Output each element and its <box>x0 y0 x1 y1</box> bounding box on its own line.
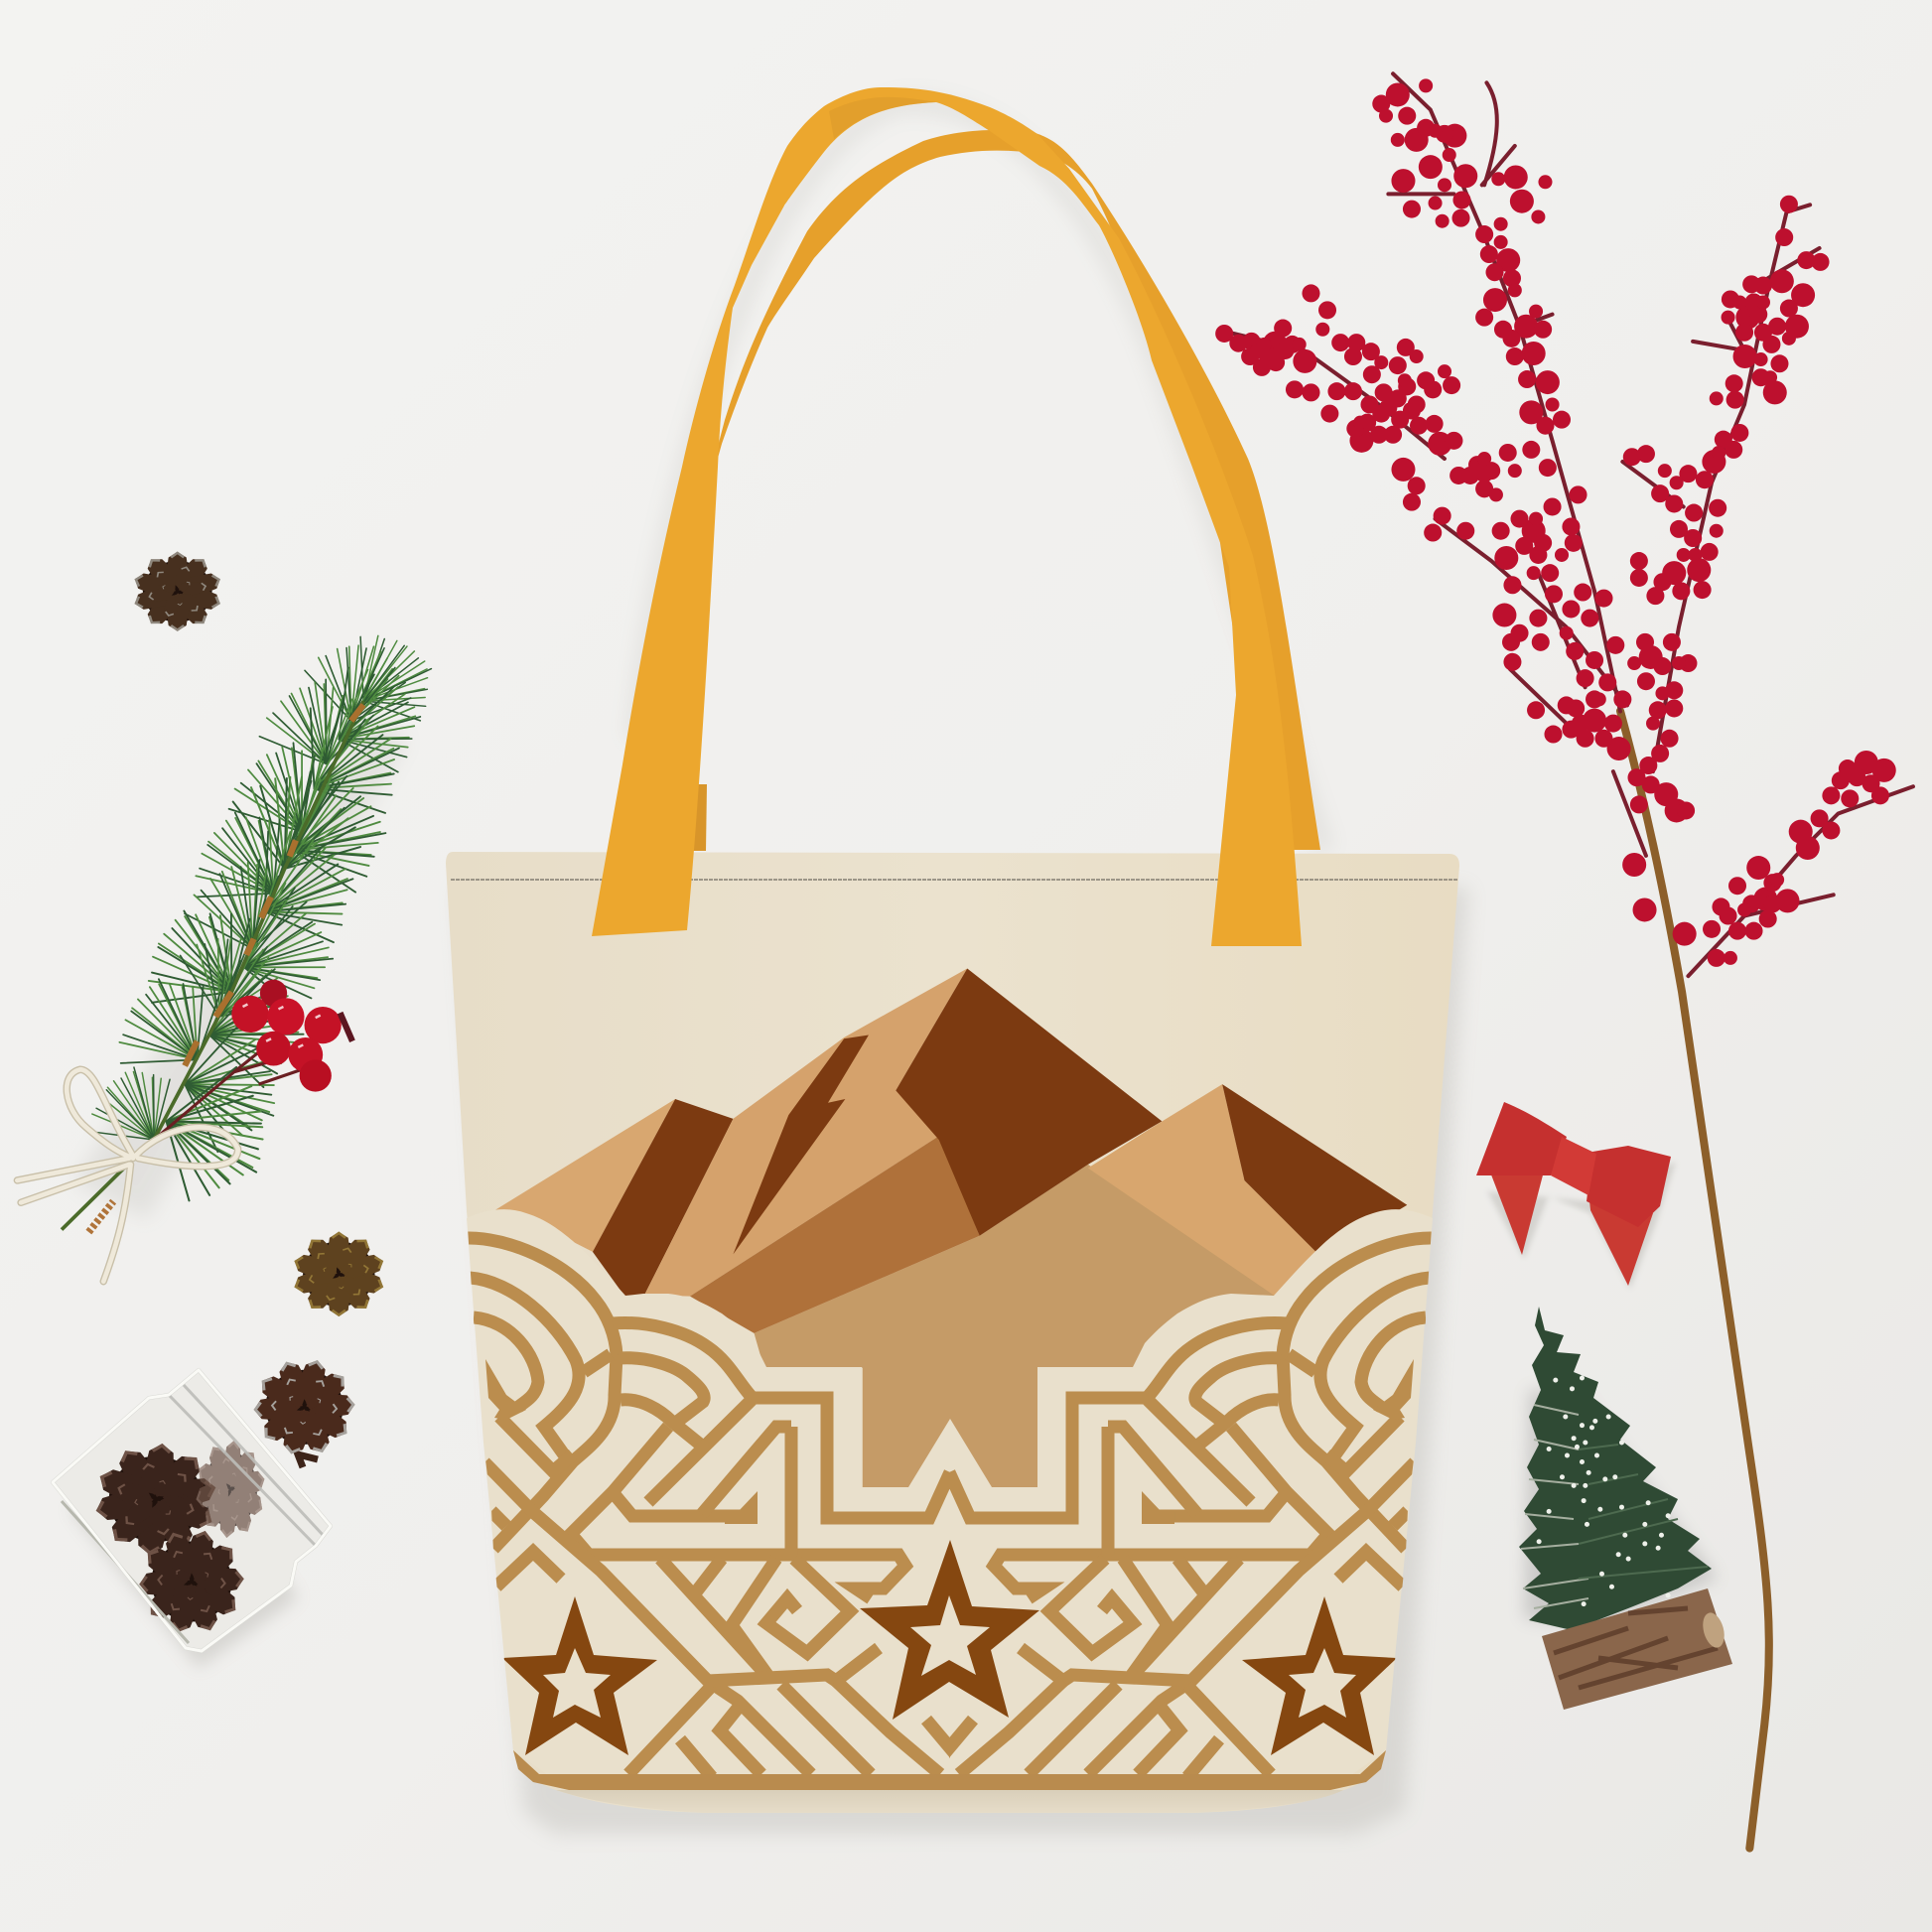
twigs <box>1229 73 1913 976</box>
pine sprig <box>17 615 451 1282</box>
back strap left foot <box>690 784 707 851</box>
strap shadow <box>634 104 1324 850</box>
pinecone upper jar <box>241 1347 367 1467</box>
main stem <box>1620 711 1769 1849</box>
pattern panel <box>467 87 1433 1790</box>
star centre <box>860 1540 1039 1720</box>
large berries <box>1275 94 1884 934</box>
stump <box>1542 1588 1732 1710</box>
stitch line <box>451 879 1457 881</box>
bow knot <box>1551 1137 1596 1195</box>
bow tails <box>1489 1168 1545 1255</box>
mountains <box>495 968 1407 1491</box>
tree snow <box>1539 1378 1668 1604</box>
bag shadow <box>456 888 1468 1834</box>
berry branch <box>1224 73 1913 1849</box>
pinecone top <box>131 552 223 631</box>
sprig berries <box>154 980 352 1140</box>
bottle brush tree <box>1519 1307 1732 1710</box>
bottom fold <box>556 1790 1343 1813</box>
needles <box>74 615 451 1221</box>
cones in jar <box>71 1423 240 1576</box>
bow wings <box>1476 1102 1567 1175</box>
small berries <box>1257 85 1789 958</box>
strap shade <box>829 97 936 139</box>
back strap <box>710 130 1320 850</box>
front strap <box>592 87 1302 946</box>
red bow <box>1476 1102 1676 1289</box>
lattice left <box>467 1238 973 1790</box>
pinecone middle <box>291 1232 387 1316</box>
bag body <box>446 852 1459 1813</box>
glass jar <box>53 1370 331 1668</box>
medium berries <box>1224 104 1880 958</box>
foliage <box>1519 1307 1712 1630</box>
rope bow <box>17 1069 238 1282</box>
lattice right <box>926 1238 1433 1790</box>
